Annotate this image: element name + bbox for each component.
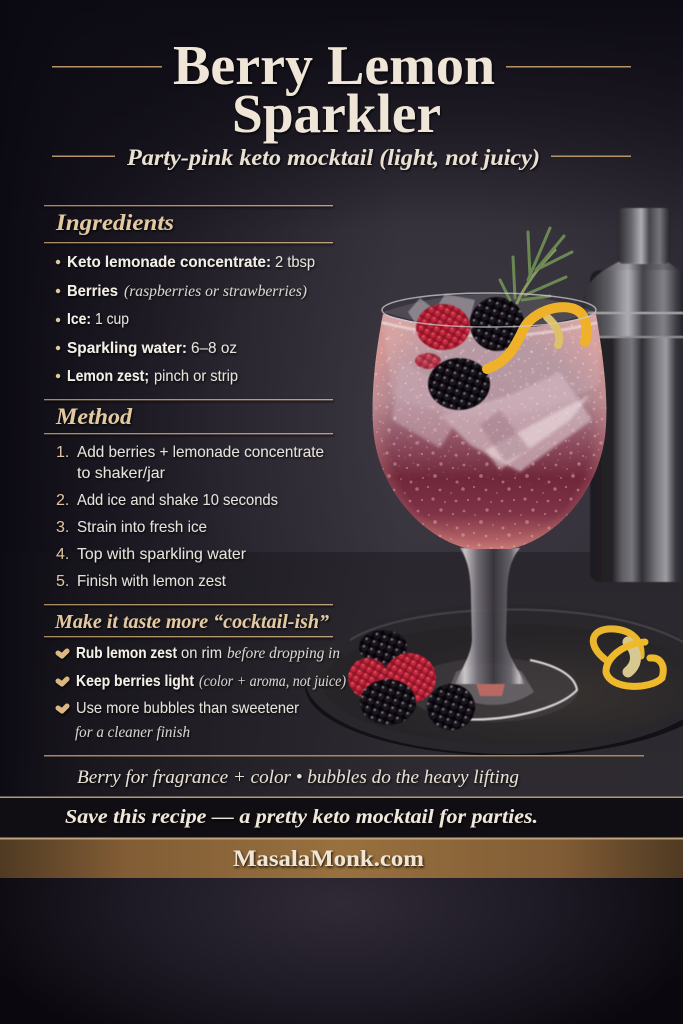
tip list: before dropping in	[227, 645, 340, 662]
ingredient list: 6–8 oz	[191, 340, 237, 357]
ingredient list: 2 tbsp	[275, 254, 315, 271]
title: Berry Lemon	[173, 35, 495, 97]
plate with garnish	[305, 604, 683, 756]
tip list: for a cleaner finish	[75, 724, 190, 741]
background: dark studio wall	[0, 0, 683, 560]
method steps: Top with sparkling water	[77, 546, 247, 563]
method steps: to shaker/jar	[77, 465, 166, 482]
method steps: 1.	[56, 444, 69, 461]
title	[173, 35, 495, 144]
call to action: save this recipe: Save this recipe — a pretty keto mocktail for parties.	[65, 806, 538, 828]
tip list: (color + aroma, not juice)	[199, 673, 346, 690]
heading: tips: Make it taste more “cocktail-ish”	[54, 611, 329, 633]
ingredient list: Keto lemonade concentrate:	[67, 254, 271, 271]
ingredient list: Lemon zest;	[67, 368, 149, 385]
ingredient list: Sparkling water:	[67, 340, 187, 357]
band: brand bar	[0, 839, 683, 878]
glass upper interior	[383, 294, 596, 328]
tip checks	[58, 651, 67, 711]
glass foot	[406, 658, 578, 722]
ingredient list: 1 cup	[95, 311, 129, 328]
ingredient list: (raspberries or strawberries)	[124, 283, 307, 300]
band: save strip	[0, 797, 683, 838]
ingredient list: Ice:	[67, 311, 91, 328]
heading: ingredients: Ingredients	[55, 210, 174, 235]
panel: cocktail-ish tips	[44, 604, 346, 741]
ingredient list: Berries	[67, 283, 118, 300]
brand: masalamonk.com: MasalaMonk.com	[233, 846, 424, 871]
method steps	[56, 444, 324, 590]
berries on plate	[348, 630, 475, 730]
panel: ingredients	[44, 205, 333, 385]
rosemary sprig	[500, 228, 572, 303]
band: bottom caption divider	[44, 755, 644, 756]
tip list	[75, 645, 346, 741]
panel: method	[44, 399, 333, 590]
ingredient list	[56, 254, 315, 385]
berries in glass	[415, 297, 524, 410]
method steps: 2.	[56, 492, 69, 509]
subtitle: Party-pink keto mocktail (light, not juicy)	[126, 145, 540, 170]
background: left shadow	[0, 0, 400, 800]
method steps: 5.	[56, 573, 69, 590]
tip list: Use more bubbles than sweetener	[76, 700, 300, 717]
background: top shadow	[0, 0, 683, 230]
method steps: Finish with lemon zest	[77, 573, 227, 590]
method steps: 3.	[56, 519, 69, 536]
glass rim	[382, 293, 596, 327]
method steps: Add berries + lemonade concentrate	[77, 444, 324, 461]
background: table surface	[0, 552, 683, 802]
decorative bottom area	[0, 877, 683, 1024]
glass bowl with liquid	[372, 314, 606, 549]
tip list: Keep berries light	[76, 673, 195, 690]
heading: method: Method	[55, 404, 133, 429]
wine glass with drink	[365, 228, 615, 684]
ingredient list: pinch or strip	[154, 368, 238, 385]
method steps: Add ice and shake 10 seconds	[77, 492, 278, 509]
method steps: Strain into fresh ice	[77, 519, 207, 536]
lemon twist on plate	[593, 629, 663, 686]
lemon peel in glass	[487, 307, 587, 369]
title block	[126, 35, 540, 170]
method steps: 4.	[56, 546, 69, 563]
title: Sparkler	[232, 83, 441, 144]
tip list: on rim	[181, 645, 222, 662]
glass stem	[455, 548, 525, 684]
ice above rim	[408, 294, 475, 330]
cocktail shaker	[583, 208, 683, 582]
tip list: Rub lemon zest	[76, 645, 178, 662]
caption: berry for fragrance: Berry for fragrance + color • bubbles do the heavy lifting	[77, 767, 519, 788]
